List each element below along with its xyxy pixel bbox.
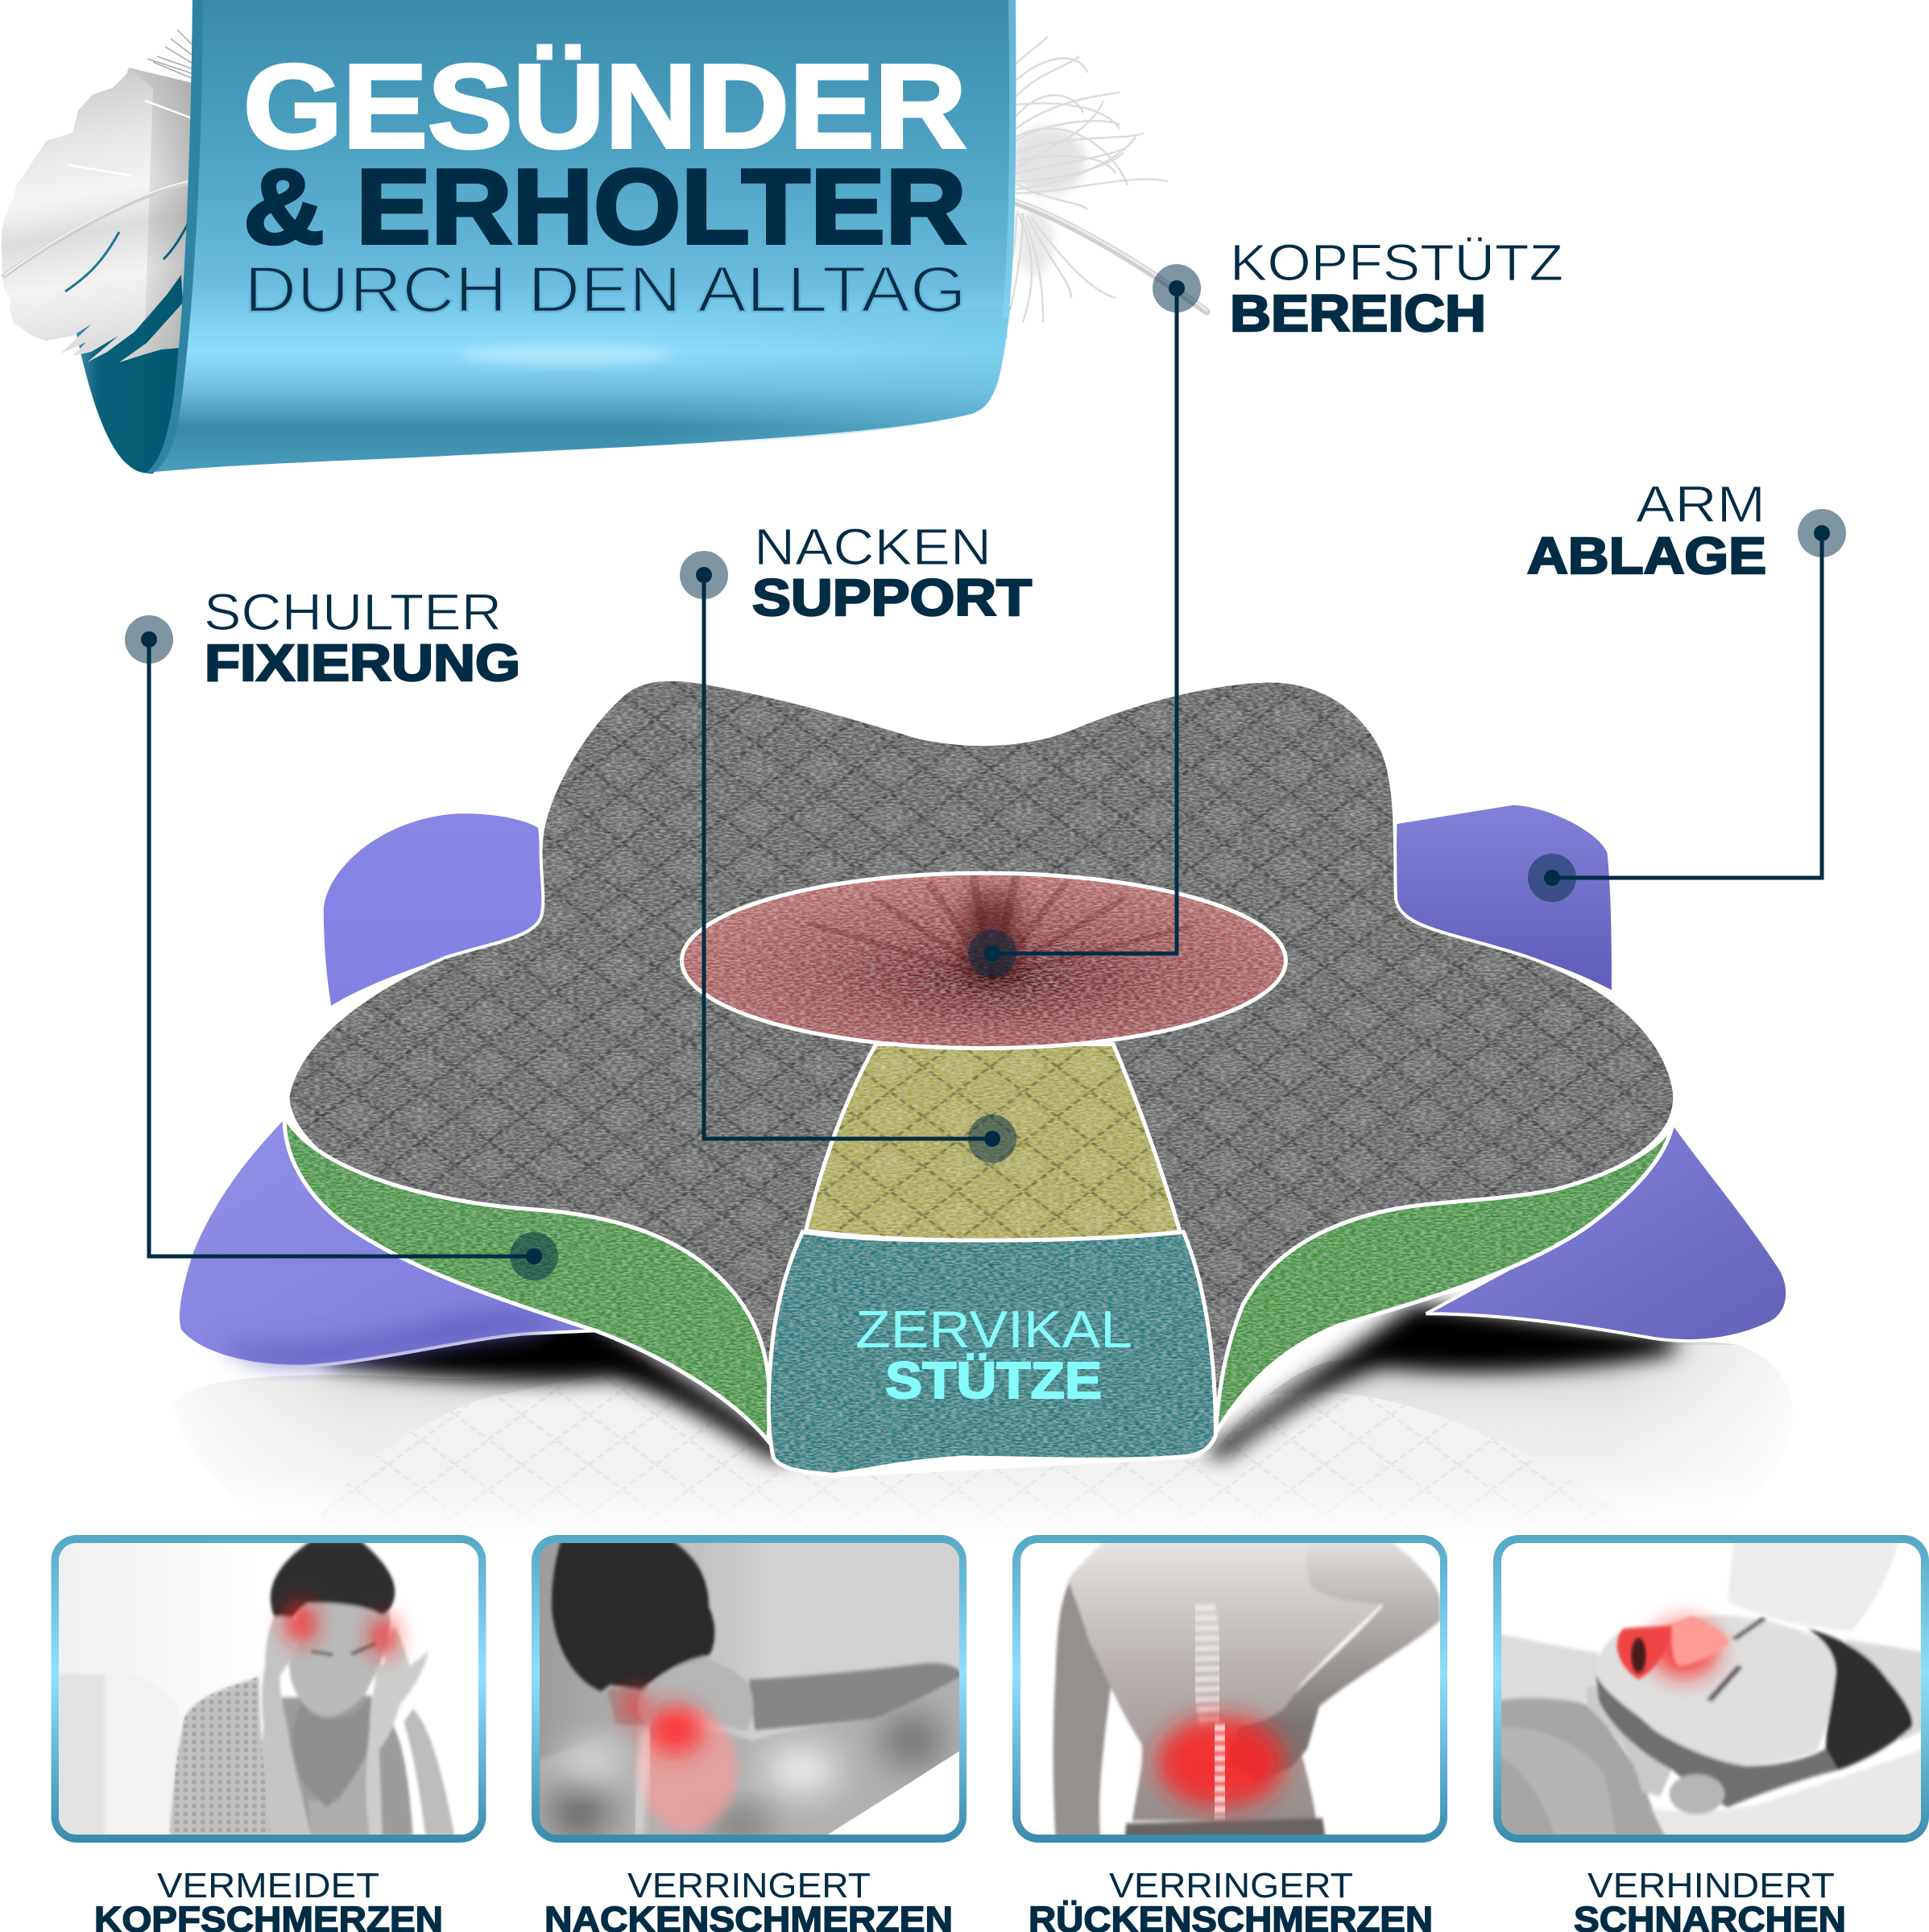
callout: Schulter Fixierung: SCHULTER [204,583,502,641]
callout: Arm Ablage [1527,475,1846,902]
zone: neck support (yellow) [805,1045,1180,1240]
pillow top: grey quilted surface [288,680,1674,1463]
feather shaft [1013,201,1207,312]
arm rest: purple upper left [324,813,544,1006]
panel: back pain photo [1012,1535,1447,1843]
callout: Nacken Support [680,518,1032,1163]
zone: shoulder fixation left (green) [284,1116,770,1441]
ribbon: title banner [147,0,1016,473]
label: ZERVIKAL STÜTZE [855,1300,1132,1409]
caption: Verringert Rückenschmerzen: VERRINGERT [1109,1867,1353,1905]
zone: shoulder fixation right (green) [1215,1111,1674,1433]
pillow illustration [164,680,1803,1565]
arm rest: purple lower right [1426,1124,1787,1341]
ribbon back fold [74,225,193,474]
pillow reflection [164,1340,1803,1565]
caption: Vermeidet Kopfschmerzen [94,1867,443,1932]
arm rest: purple upper right [1396,805,1612,990]
caption: Verringert Nackenschmerzen: VERRINGERT [627,1867,871,1905]
title: & ERHOLTER: & ERHOLTER [243,147,967,266]
callout: Kopfstütz Bereich: KOPFSTÜTZ [1230,234,1563,292]
feather: left vane [2,30,192,362]
panel: neck pain photo [532,1535,968,1843]
panel: snoring photo [1493,1535,1929,1843]
callout: Nacken Support: SUPPORT [752,569,1032,627]
zone: cervical support (teal) [768,1232,1215,1475]
zone: head rest (red) [681,873,1285,1049]
arm rest: purple lower left [178,1119,595,1367]
caption: Verhindert Schnarchen [1574,1867,1846,1932]
green zone outlines [284,1111,1674,1441]
pillow shadow [325,1302,1674,1463]
callout: Schulter Fixierung: FIXIERUNG [205,634,520,692]
label: ZERVIKAL STÜTZE: STÜTZE [885,1351,1102,1409]
label: ZERVIKAL STÜTZE: ZERVIKAL [855,1300,1132,1359]
callout: Arm Ablage: ARM [1636,475,1765,533]
caption: Vermeidet Kopfschmerzen: VERMEIDET [157,1867,379,1905]
callout: Nacken Support: NACKEN [754,518,991,576]
callout: Kopfstütz Bereich: BEREICH [1230,284,1486,342]
callout: Schulter Fixierung [125,583,558,1280]
callout: Kopfstütz Bereich [968,234,1563,978]
caption: Verhindert Schnarchen: VERHINDERT [1587,1867,1835,1905]
callout: Arm Ablage: ABLAGE [1527,527,1766,585]
panel: headache photo [52,1535,486,1843]
title: DURCH DEN ALLTAG: DURCH DEN ALLTAG [244,254,967,326]
caption: Verringert Rückenschmerzen [1029,1867,1433,1932]
caption: Verringert Nackenschmerzen [544,1867,953,1932]
title: GESÜNDER: GESÜNDER [243,40,967,173]
feather: right wispy part [1004,36,1207,338]
